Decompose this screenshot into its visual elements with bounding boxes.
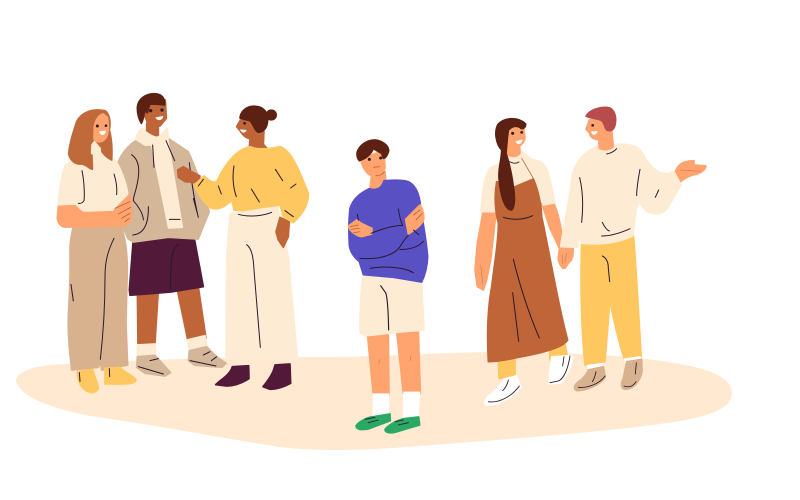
person: man with beige jacket [118, 94, 226, 376]
person: man in cream sweater and yellow trousers [558, 107, 706, 391]
person: woman in brown dress [475, 119, 574, 406]
person: man with crossed arms in purple sweater [348, 140, 428, 433]
person: woman in yellow sweater [178, 106, 308, 389]
ground blob [16, 352, 732, 450]
person: woman with long hair [57, 110, 136, 393]
